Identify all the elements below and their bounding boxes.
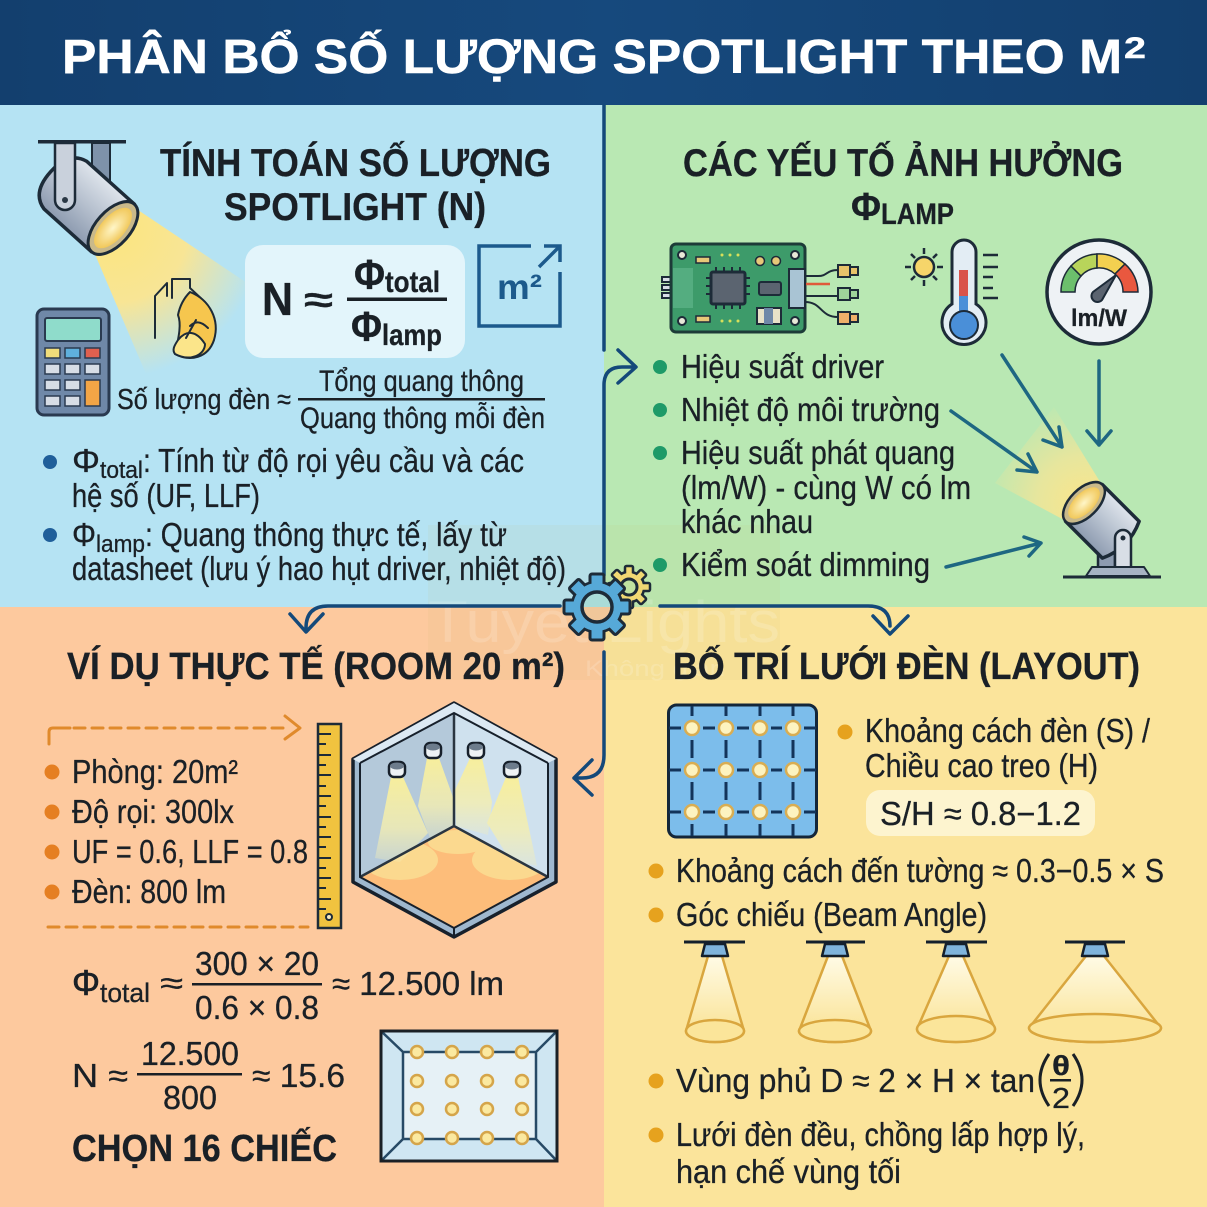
result: choose 16 lamps: CHỌN 16 CHIẾC — [72, 1126, 337, 1170]
bullet list: flux definitions: total — [100, 457, 143, 484]
panel: blue background — [0, 104, 604, 607]
bullet list: factors: Nhiệt độ môi trường — [681, 391, 940, 428]
icon: large blue gear — [564, 574, 630, 640]
connector lines and arrows — [290, 105, 908, 795]
bullet: coverage formula: 2 — [1052, 1083, 1070, 1115]
bullet list: factors — [653, 348, 971, 583]
icon: driver circuit board — [662, 244, 858, 332]
bullet: spacing to height: Chiều cao treo (H) — [865, 747, 1098, 784]
bullet: coverage formula: θ — [1052, 1050, 1070, 1081]
bullet list: flux definitions: datasheet (lưu ý hao hụt driver, nhiệt độ) — [72, 550, 566, 587]
bullet list: flux definitions: : Tính từ độ rọi yêu cầu và các — [143, 442, 524, 479]
formula box: Φ — [354, 251, 385, 298]
bullet list: flux definitions: lamp — [96, 531, 145, 558]
icon: lamp bulb sketch — [155, 279, 216, 358]
icon: area m² — [479, 246, 560, 326]
icon: lm/W gauge — [1047, 240, 1151, 344]
icon: ruler — [318, 724, 341, 928]
bullet list: flux definitions — [43, 442, 566, 587]
heading: factors: Φ — [851, 186, 881, 229]
panel: orange background — [0, 607, 604, 1207]
formula box: lamp — [382, 319, 442, 352]
calculation: lamp count: 12.500 — [141, 1035, 239, 1072]
bullet list: room data — [44, 753, 308, 910]
header bar — [0, 0, 1207, 105]
icon: spotlight beam — [94, 208, 250, 395]
watermark: Không gian — [585, 656, 725, 681]
bullet list: flux definitions: : Quang thông thực tế, lấy từ — [145, 516, 507, 553]
bullet list: factors: Hiệu suất driver — [681, 348, 884, 385]
calculation: total flux: Φ — [72, 962, 100, 1003]
calculation: total flux — [72, 945, 504, 1026]
arrows to spotlight — [946, 355, 1111, 567]
bullet list: flux definitions: Φ — [72, 516, 96, 553]
icon: thermometer with sun — [905, 240, 998, 344]
icon: small yellow gear — [608, 566, 650, 608]
bullet: spacing to height: S/H ≈ 0.8−1.2 — [880, 795, 1081, 832]
bullet: coverage formula — [648, 1050, 1082, 1115]
icon: lm/W gauge: lm/W — [1071, 305, 1127, 332]
icon: gears — [564, 566, 650, 640]
calculation: total flux: 300 × 20 — [195, 945, 319, 982]
calculation: lamp count: N ≈ — [72, 1057, 128, 1094]
title: 2 — [1124, 32, 1146, 65]
bullet: coverage formula: Vùng phủ D ≈ 2 × H × tan — [676, 1062, 1035, 1099]
panel: example — [44, 644, 565, 1170]
icon: beam angle cones — [684, 942, 1161, 1042]
icon: room with lights — [353, 703, 556, 937]
title: PHÂN BỔ SỐ LƯỢNG SPOTLIGHT THEO M — [62, 29, 1122, 84]
word formula: Tổng quang thông — [319, 365, 524, 398]
calculation: lamp count — [72, 1035, 345, 1116]
bullet list: factors: Kiểm soát dimming — [681, 546, 930, 583]
icon: ceiling spotlight — [29, 140, 147, 263]
dashed dimension arrows — [48, 716, 308, 927]
bullet list: room data: Đèn: 800 lm — [72, 873, 226, 910]
word formula: Số lượng đèn ≈ — [117, 384, 291, 416]
panel: green background — [604, 104, 1207, 607]
heading: layout: BỐ TRÍ LƯỚI ĐÈN (LAYOUT) — [673, 643, 1140, 688]
heading: calculation: SPOTLIGHT (N) — [224, 186, 486, 229]
panel: factors — [653, 140, 1161, 583]
heading: factors — [683, 140, 1123, 231]
bullet list: factors: Hiệu suất phát quang — [681, 434, 955, 471]
icon: floor spotlight — [1056, 475, 1161, 578]
bullet list: flux definitions: Φ — [72, 442, 100, 479]
calculation: lamp count: 800 — [163, 1079, 217, 1116]
calculation: total flux: total — [100, 978, 150, 1008]
heading: factors: LAMP — [881, 198, 954, 231]
formula box: N — [262, 273, 293, 325]
formula box — [245, 245, 465, 358]
calculation: total flux: ≈ 12.500 lm — [332, 965, 504, 1002]
bullet list: room data: Phòng: 20m² — [72, 753, 238, 790]
icon: ceiling lamp layout — [381, 1031, 557, 1161]
bullet list: factors: (lm/W) - cùng W có lm — [681, 469, 971, 506]
bullet: even grid — [648, 1116, 1085, 1190]
bullet: spacing to height: Khoảng cách đèn (S) / — [865, 712, 1151, 749]
heading: calculation — [160, 140, 551, 229]
formula box: ≈ — [304, 279, 333, 320]
bullet: even grid: hạn chế vùng tối — [676, 1153, 901, 1190]
heading: factors: CÁC YẾU TỐ ẢNH HƯỞNG — [683, 140, 1123, 185]
watermark — [428, 525, 780, 681]
icon: floor spotlight beam — [995, 407, 1102, 521]
formula box: Φ — [351, 303, 382, 350]
bullet list: room data: Độ rọi: 300lx — [72, 793, 234, 830]
watermark: Tuyet Lights — [428, 590, 780, 655]
bullet: beam angle: Góc chiếu (Beam Angle) — [676, 896, 987, 933]
icon: area m²: m² — [497, 268, 542, 307]
icon: lamp grid — [668, 705, 816, 837]
icon: calculator — [37, 309, 109, 415]
panel: layout — [648, 643, 1164, 1190]
word formula — [117, 365, 545, 435]
bullet: spacing to height — [838, 712, 1151, 836]
heading: calculation: TÍNH TOÁN SỐ LƯỢNG — [160, 140, 551, 185]
calculation: lamp count: ≈ 15.6 — [252, 1057, 345, 1094]
calculation: total flux: ≈ — [160, 965, 183, 1001]
panel: calculation — [29, 140, 566, 587]
bullet list: room data: UF = 0.6, LLF = 0.8 — [72, 833, 308, 870]
bullet list: factors: khác nhau — [681, 503, 813, 540]
formula box: total — [385, 266, 440, 299]
panel: yellow background — [604, 607, 1207, 1207]
bullet: even grid: Lưới đèn đều, chồng lấp hợp lý, — [676, 1116, 1085, 1153]
heading: example: VÍ DỤ THỰC TẾ (ROOM 20 m²) — [67, 644, 565, 688]
calculation: total flux: 0.6 × 0.8 — [195, 989, 319, 1026]
bullet list: flux definitions: hệ số (UF, LLF) — [72, 477, 260, 514]
word formula: Quang thông mỗi đèn — [300, 402, 545, 435]
